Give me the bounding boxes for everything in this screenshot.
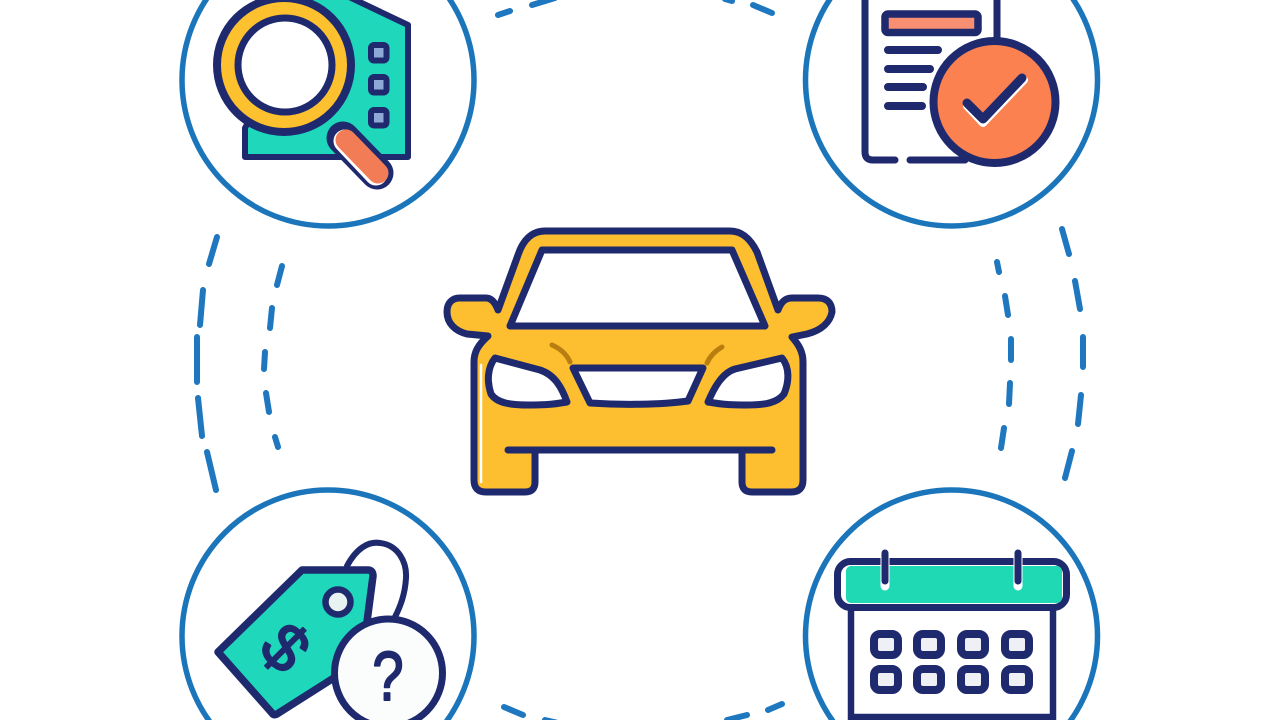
icon: document outline	[865, 0, 997, 160]
icon: calendar day grid	[874, 634, 1029, 690]
circle border: document	[806, 0, 1098, 226]
circle border: price	[182, 490, 474, 720]
car right headlight	[708, 358, 788, 405]
icon: document header bar	[885, 14, 978, 32]
icon: question badge	[334, 619, 442, 720]
circle border: inspection	[182, 0, 474, 226]
circle border: calendar	[806, 490, 1098, 720]
car body	[447, 231, 832, 492]
panel: calendar icon	[806, 490, 1098, 720]
panel: inspection icon	[182, 0, 474, 226]
icon: check badge	[934, 41, 1056, 163]
car hood creases	[552, 345, 722, 363]
dashed connectors: bottom arc	[504, 704, 782, 720]
panel: price tag icon	[182, 490, 474, 720]
car: central illustration	[447, 231, 832, 492]
icon: tag hole	[326, 590, 350, 614]
dashed connectors: top arc	[498, 0, 772, 15]
car highlight	[480, 365, 482, 482]
car windshield	[510, 250, 765, 326]
icon: document text lines	[888, 50, 938, 106]
icon: tag string	[347, 543, 406, 617]
panel: document approval icon	[806, 0, 1098, 226]
icon: calendar rings	[885, 553, 1018, 586]
icon: calendar body	[851, 600, 1053, 717]
car bumper line	[508, 446, 772, 454]
car grille	[573, 368, 703, 404]
icon: price tag	[218, 570, 373, 715]
dashed connectors: left arcs	[197, 237, 282, 490]
icon: building windows	[371, 45, 386, 126]
icon: dollar sign: $	[247, 608, 325, 686]
question mark: ?	[372, 638, 404, 715]
icon: magnifier handle	[343, 138, 378, 174]
icon: building	[245, 0, 408, 157]
icon: magnifier lens	[217, 0, 351, 132]
car left headlight	[488, 358, 567, 405]
dashed connectors: right arcs	[997, 229, 1083, 478]
icon: calendar header	[838, 562, 1066, 608]
